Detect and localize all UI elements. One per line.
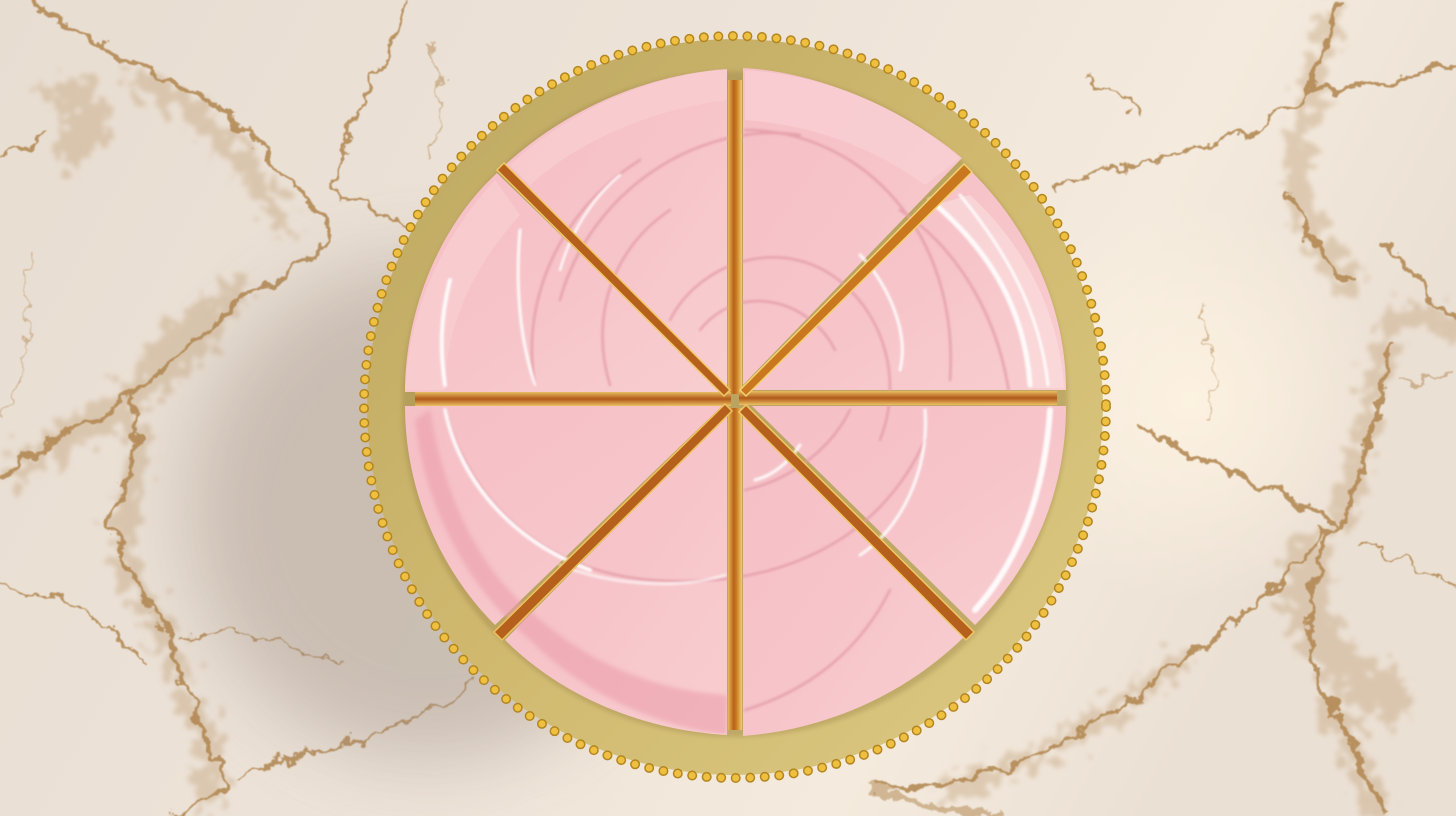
slice: top right outer (745, 172, 1066, 390)
plate shadow (190, 260, 670, 760)
divider: vertical top (728, 80, 742, 394)
slice: top right inner (743, 68, 962, 385)
cake shadow on plate (402, 71, 1068, 737)
cake slices (405, 68, 1066, 736)
divider: diagonal top left (497, 163, 730, 396)
slice: bottom left outer (405, 406, 722, 625)
divider: vertical bottom (728, 408, 742, 730)
divider: diagonal bottom left (494, 404, 732, 640)
slice: top left inner (505, 69, 727, 392)
divider: horizontal right (739, 391, 1057, 405)
gold plate (367, 39, 1103, 775)
beaded rim (364, 36, 1106, 778)
divider: diagonal top right (740, 164, 972, 396)
slice: bottom left inner (505, 415, 727, 735)
slice: bottom right outer (752, 406, 1066, 625)
icing swirls (405, 69, 1064, 735)
slice: top left outer (405, 173, 722, 392)
slice: bottom right inner (743, 415, 965, 736)
gold dividers (415, 80, 1057, 730)
divider: horizontal left (415, 392, 731, 406)
divider: diagonal bottom right (739, 405, 974, 640)
